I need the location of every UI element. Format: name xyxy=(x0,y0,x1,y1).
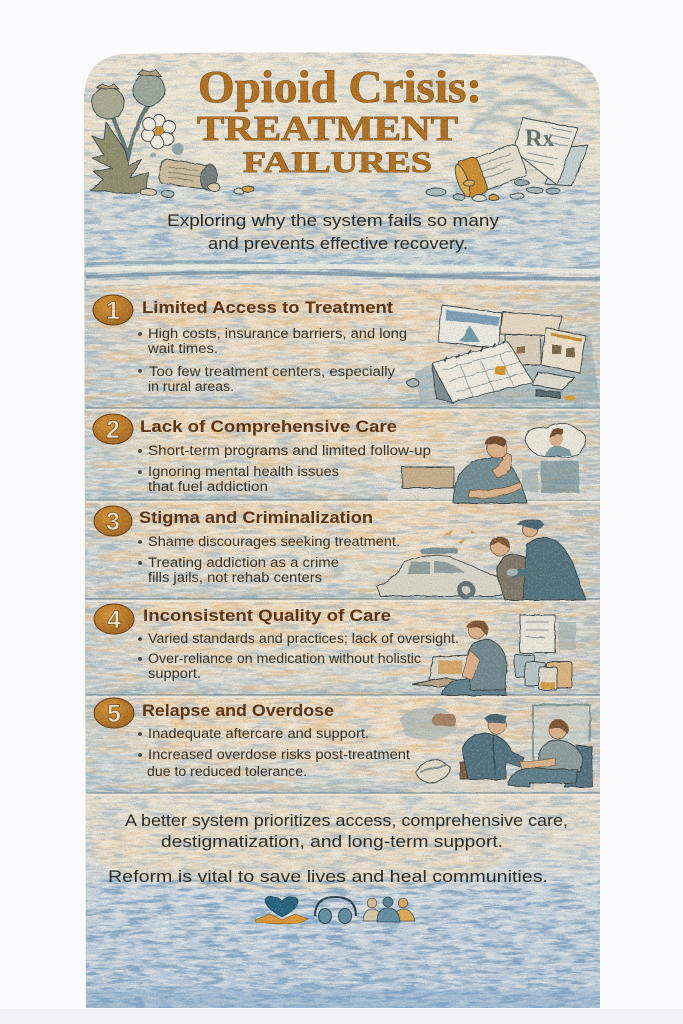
closing statement xyxy=(108,811,568,886)
title xyxy=(197,62,482,179)
grain overlay xyxy=(84,50,602,1010)
number badge 3 xyxy=(94,506,132,536)
textured panel background xyxy=(84,50,602,1010)
title: Opioid Crisis: xyxy=(198,62,482,112)
panel: stigma and criminalization xyxy=(94,506,586,600)
heading 5: Relapse and Overdose xyxy=(142,702,334,720)
subtitle: Exploring why the system fails so many xyxy=(167,211,500,230)
title: TREATMENT xyxy=(197,109,458,148)
illustration: officer and patient seated xyxy=(400,705,600,792)
panel: limited access to treatment xyxy=(93,295,600,404)
subtitle: and prevents effective recovery. xyxy=(208,234,468,253)
bullets 3: Shame discourages seeking treatment. xyxy=(148,534,400,549)
illustration: police officer arresting man by car xyxy=(377,520,586,600)
number badge 2 xyxy=(93,414,133,444)
bullets 4: support. xyxy=(148,666,201,681)
bullets 5 xyxy=(138,726,410,779)
number badge 5: 5 xyxy=(107,700,121,728)
illustration: pills left xyxy=(140,183,254,198)
bullets 4: Over-reliance on medication without holistic xyxy=(148,651,421,666)
illustration: orange pill bottle and pills xyxy=(426,141,560,202)
illustration: man in distress with thought bubble xyxy=(388,423,600,503)
icon: headphones xyxy=(315,897,356,924)
panel: inconsistent quality of care xyxy=(94,604,576,695)
illustration: poppies and flower xyxy=(90,70,184,194)
illustration: prescription paper: Rx xyxy=(525,126,554,152)
panel: relapse and overdose xyxy=(94,698,600,792)
bullets 5: Inadequate aftercare and support. xyxy=(148,726,369,741)
number badge 4 xyxy=(94,604,134,634)
bullets 1: in rural areas. xyxy=(148,379,234,394)
subtitle xyxy=(167,211,500,253)
closing statement: Reform is vital to save lives and heal communities. xyxy=(108,867,548,886)
number badge 4: 4 xyxy=(107,606,121,634)
closing statement: destigmatization, and long-term support. xyxy=(161,832,503,851)
heading 4: Inconsistent Quality of Care xyxy=(143,607,391,625)
bullets 2 xyxy=(138,443,431,494)
bullets 3 xyxy=(138,534,400,585)
number badge 1: 1 xyxy=(106,297,120,325)
icon: heart in hands xyxy=(255,896,308,924)
bullets 3: fills jails, not rehab centers xyxy=(148,570,322,585)
icon: community people xyxy=(363,897,415,922)
illustration: smoke xyxy=(472,78,585,135)
bullets 1 xyxy=(138,326,407,394)
illustration: calendar and paperwork xyxy=(407,305,600,404)
bullets 5: Increased overdose risks post-treatment xyxy=(148,747,410,762)
bullets 1: High costs, insurance barriers, and long xyxy=(148,326,407,341)
bullets 3: Treating addiction as a crime xyxy=(148,555,339,570)
number badge 5 xyxy=(94,698,134,728)
bullets 2: Short-term programs and limited follow-up xyxy=(148,443,431,458)
number badge 1 xyxy=(93,295,133,325)
illustration: man at laptop with certificate and jars xyxy=(412,615,576,695)
closing statement: A better system prioritizes access, comprehensive care, xyxy=(125,811,568,830)
title: FAILURES xyxy=(243,146,432,179)
bullets 1: wait times. xyxy=(147,341,218,356)
bullets 4 xyxy=(138,631,459,681)
heading 3: Stigma and Criminalization xyxy=(139,509,373,527)
bullets 5: due to reduced tolerance. xyxy=(147,764,307,779)
illustration: prescription paper xyxy=(513,118,588,186)
panel: lack of comprehensive care xyxy=(93,414,600,503)
number badge 3: 3 xyxy=(106,508,120,536)
heading 1: Limited Access to Treatment xyxy=(142,299,394,317)
heading 2: Lack of Comprehensive Care xyxy=(140,418,397,436)
number badge 2: 2 xyxy=(106,416,120,444)
bullets 2: that fuel addiction xyxy=(148,479,268,494)
bullets 4: Varied standards and practices; lack of oversight. xyxy=(148,631,459,646)
bullets 2: Ignoring mental health issues xyxy=(148,464,339,479)
bottom shadow strip xyxy=(0,1009,683,1024)
bullets 1: Too few treatment centers, especially xyxy=(149,364,395,379)
illustration: tipped pill bottle left xyxy=(158,158,219,192)
